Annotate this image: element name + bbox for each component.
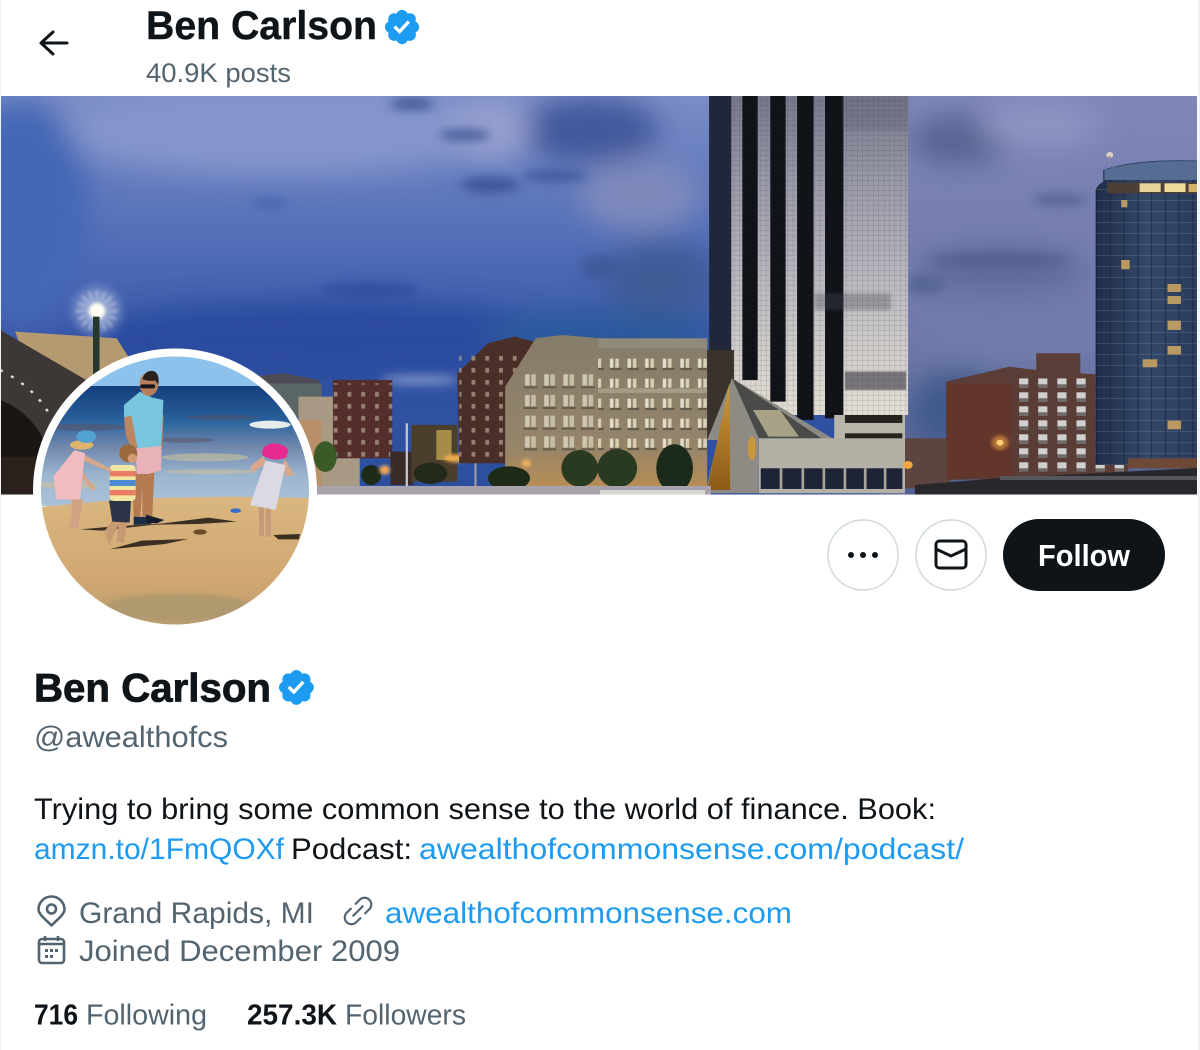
- boy in striped shirt: [104, 444, 137, 545]
- lake water: [41, 386, 309, 506]
- girl in pink dress with blue hat: [53, 430, 112, 528]
- header post count: 40.9K posts: [146, 58, 291, 88]
- tan historic hotel (right half): [597, 338, 707, 492]
- left page edge: [0, 0, 1, 1050]
- handle: @awealthofcs: [34, 721, 228, 754]
- cylindrical glass tower: [1096, 152, 1199, 468]
- lamp post with starburst: [68, 282, 126, 338]
- beach sky: [90, 356, 260, 387]
- joined date: Joined December 2009: [79, 935, 400, 968]
- following count: [34, 1000, 207, 1032]
- website link: awealthofcommonsense.com: [385, 897, 792, 930]
- sky: [0, 85, 1200, 495]
- father: [124, 371, 164, 525]
- location text: Grand Rapids, MI: [79, 897, 314, 930]
- icon: link: [342, 895, 374, 927]
- icon: back arrow: [41, 32, 67, 54]
- followers count: 257.3K: [247, 1000, 337, 1032]
- banner photo: city skyline at dusk: [0, 85, 1200, 495]
- bio text: [34, 793, 965, 866]
- message button: [916, 520, 986, 590]
- following count: 716: [34, 1000, 78, 1032]
- icon: calendar: [39, 936, 64, 963]
- avatar: profile photo in white ring: [25, 348, 325, 633]
- brown hotel: [457, 337, 534, 463]
- bio text: awealthofcommonsense.com/podcast/: [419, 833, 965, 866]
- more options button: [828, 520, 898, 590]
- following count: Following: [86, 1000, 207, 1032]
- followers count: [247, 1000, 466, 1032]
- bio text: Podcast:: [291, 833, 412, 866]
- concrete podium and glass chapel: [705, 378, 905, 493]
- mid-left civic buildings: [259, 373, 476, 486]
- girl in white dress with pink hat: [250, 443, 294, 537]
- icon: location pin: [38, 896, 64, 926]
- beach shadows: [80, 518, 300, 549]
- low building, red brick block and corner lamp: [903, 353, 1128, 488]
- tan historic hotel (left half): [488, 335, 601, 492]
- followers count: Followers: [345, 1000, 466, 1032]
- icon: profile verified badge: [279, 670, 314, 705]
- sand: [42, 496, 309, 624]
- header title: Ben Carlson: [146, 4, 377, 48]
- foreground riverside and bridge: [316, 468, 1197, 495]
- icon: header verified badge: [385, 10, 419, 44]
- left bridge and tan wall: [0, 317, 128, 495]
- bio text: amzn.to/1FmQOXf: [34, 833, 285, 866]
- bio text: Trying to bring some common sense to the world of finance. Book:: [34, 793, 936, 826]
- follow button: Follow: [1038, 538, 1131, 573]
- glass skyscraper: [707, 90, 908, 440]
- right page edge: [1198, 0, 1200, 1050]
- follow button: [1003, 519, 1165, 591]
- profile name: Ben Carlson: [34, 666, 271, 710]
